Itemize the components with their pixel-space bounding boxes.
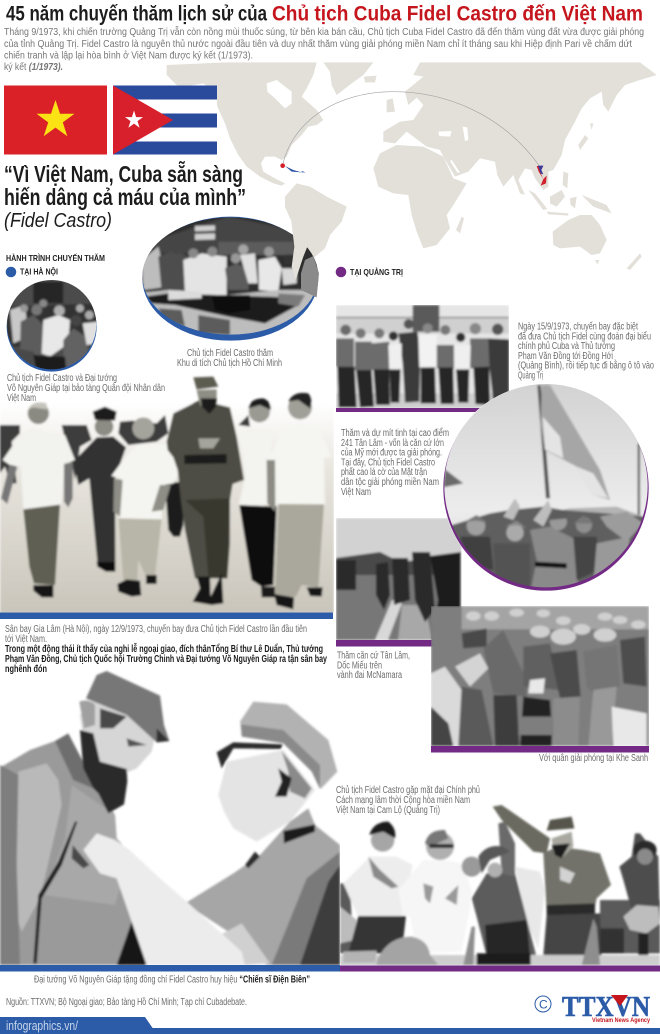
- caption: Tan Lam base: Dốc Miếu trên: [337, 659, 382, 671]
- logo: TTXVN: TTXVN: [562, 992, 650, 1023]
- caption: airport: nghênh đón: [5, 664, 47, 675]
- caption: Cam Lo: Chủ tịch Fidel Castro gặp mặt đại Chính phủ: [336, 784, 480, 796]
- heading: in Hanoi: [6, 266, 58, 277]
- table: [340, 955, 660, 966]
- title: [6, 2, 643, 26]
- photo: with liberation soldiers at Khe Sanh: [431, 606, 649, 746]
- caption: airport: Sân bay Gia Lâm (Hà Nội), ngày 12/9/1973, chuyến bay đưa Chủ tịch Fidel Castro lần đầu tiên: [5, 623, 307, 635]
- world map: [167, 62, 657, 272]
- Giap: uniform: [185, 808, 340, 965]
- map: Eurasia: [383, 62, 657, 195]
- logo: TTXVN: C: [539, 998, 548, 1012]
- background horizon: [340, 883, 660, 953]
- map: South America: [285, 183, 347, 272]
- caption: Castro and Giap at the museum: Việt Nam: [7, 393, 36, 404]
- Giap: cap and head: [217, 702, 337, 842]
- photo: Castro raising the flag (circle): [440, 382, 653, 595]
- caption: Ho Chi Minh relic site: [177, 347, 282, 369]
- Castro: torso: [0, 733, 147, 965]
- caption: Ho Chi Minh relic site: Chủ tịch Fidel Castro thăm: [187, 347, 273, 359]
- checked shirt man: [301, 256, 319, 297]
- caption: Ho Chi Minh relic site: Khu di tích Chủ tịch Hồ Chí Minh: [177, 357, 282, 369]
- photo: Tan Lam base, Doc Mieu: [336, 518, 462, 640]
- text: Tan Lam rally: [341, 427, 449, 498]
- footer band: infographics.vn/: [6, 1019, 78, 1033]
- source: Nguồn: TTXVN; Bộ Ngoại giao; Bảo tàng Hồ Chí Minh; Tạp chí Cubadebate.: [6, 996, 247, 1008]
- caption: Castro and Giap at the museum: [7, 372, 165, 404]
- men on the road: [376, 552, 435, 622]
- caption: Tan Lam base: Thăm căn cứ Tân Lâm,: [337, 650, 410, 662]
- photo: arrival group at Dong Hoi: [336, 305, 509, 408]
- quote: hiến dâng cả máu của mình”: [4, 184, 246, 210]
- man 2 dark uniform: [73, 407, 126, 572]
- text: arrival: Quảng Trị: [518, 370, 543, 382]
- bar: Khe Sanh photo: [431, 746, 649, 752]
- man in helmet raising Castro's hand: [472, 822, 536, 955]
- bar: airport photo: [0, 612, 333, 619]
- map: Africa: [373, 145, 467, 248]
- background walker: [165, 482, 183, 537]
- heading: in Hanoi: TẠI HÀ NỘI: [20, 266, 58, 276]
- caption: airport: tới Việt Nam.: [5, 634, 47, 645]
- heading: in Quang Tri: [336, 266, 403, 277]
- text: Tan Lam rally: Tại đây, Chủ tịch Fidel Castro: [341, 456, 435, 468]
- heading: in Quang Tri: TẠI QUẢNG TRỊ: [350, 266, 403, 277]
- man 5 white shirt black trousers: [239, 398, 277, 597]
- text: Tan Lam rally: 241 Tân Lâm - vốn là căn cứ lớn: [341, 437, 444, 449]
- soldiers and officials in line: [336, 319, 509, 407]
- text: arrival: [518, 320, 654, 382]
- Fidel Castro: [167, 377, 244, 605]
- text: Tan Lam rally: Thăm và dự mít tinh tại cao điểm: [341, 427, 449, 439]
- background crowd: [0, 415, 250, 483]
- Castro: head and beard: [79, 671, 169, 813]
- text: arrival: Phạm Văn Đồng tới Đồng Hới: [518, 350, 613, 362]
- quote: [4, 160, 246, 232]
- man 6 white shirt: [267, 393, 332, 609]
- photo: Gia Lam airport welcome: [0, 377, 334, 613]
- caption: Castro and Giap at the museum: Chủ tịch Fidel Castro và Đại tướng: [7, 372, 117, 384]
- marker: Cuba: [280, 163, 306, 172]
- bar: arrival photo: [336, 408, 510, 412]
- logo: TTXVN: Vietnam News Agency: [592, 1018, 651, 1024]
- caption: Tan Lam base: [337, 650, 410, 681]
- caption: Castro and Giap at the museum: Võ Nguyên Giáp tại bảo tàng Quân đội Nhân dân: [7, 383, 165, 394]
- Fidel Castro raising arm: [493, 805, 611, 955]
- intro paragraph: chiến tranh và lập lại hòa bình ở Việt Nam được ký kết (1/1973).: [4, 50, 253, 62]
- text: arrival: chính phủ Cuba và Thủ tướng: [518, 340, 615, 352]
- flag: Cuba: [113, 86, 217, 154]
- quote: (Fidel Castro): [4, 210, 112, 232]
- crowd of helmets: [466, 609, 646, 645]
- caption: Cam Lo: Cách mạng lâm thời Cộng hòa miền Nam: [336, 794, 470, 806]
- bar: bottom left blue: [0, 965, 340, 972]
- bar: bottom right purple: [340, 966, 660, 972]
- flight arc from Cuba to Vietnam: [283, 92, 540, 167]
- photo: Ho Chi Minh relic site (oval): [142, 216, 319, 341]
- text: Tan Lam rally: Việt Nam: [341, 487, 371, 498]
- text: Tan Lam rally: phất cao lá cờ của Mặt trận: [341, 466, 427, 478]
- quote: “Vì Việt Nam, Cuba sẵn sàng: [4, 160, 243, 187]
- man 3 white shirt: [111, 417, 184, 597]
- map: South America tip over the photo: [290, 210, 325, 280]
- photo: Castro and Giap at the museum (circle): [6, 280, 97, 372]
- map: islands: [364, 76, 642, 270]
- footer band: [0, 1017, 660, 1034]
- man behind, white shirt: [515, 867, 545, 948]
- caption: award: Đại tướng Võ Nguyên Giáp tặng đồng chí Fidel Castro huy hiệu “Chiến sĩ Điện Biên”: [34, 974, 310, 986]
- map: North America: [167, 62, 323, 186]
- intro paragraph: ký kết (1/1973).: [4, 61, 63, 73]
- text: Tan Lam rally: dân tộc giải phóng miền Nam: [341, 476, 439, 488]
- map: Australia: [553, 215, 607, 255]
- man on the right with raised hand: [618, 832, 660, 907]
- map: inland seas: [438, 127, 487, 173]
- text: Tan Lam rally: của Mỹ mới được ta giải phóng.: [341, 447, 442, 459]
- photo: Cam Lo meeting: [340, 805, 660, 966]
- Giap: arm and hand pinning the badge: [83, 833, 245, 965]
- logo: TTXVN: [535, 992, 651, 1024]
- caption: Tan Lam base: vành đai McNamara: [337, 670, 402, 681]
- heading: journey: HÀNH TRÌNH CHUYẾN THĂM: [6, 253, 105, 263]
- map: Greenland: [323, 62, 373, 95]
- man with glasses: [398, 830, 472, 953]
- flag: Vietnam: [4, 86, 107, 154]
- caption: airport: [5, 623, 327, 675]
- intro paragraph: [4, 25, 644, 73]
- title: black part: 45 năm chuyến thăm lịch sử của: [6, 2, 267, 26]
- caption: Cam Lo: Việt Nam tại Cam Lộ (Quảng Trị): [336, 805, 440, 816]
- flowers: [623, 905, 660, 933]
- marker: Vietnam: [537, 166, 547, 186]
- caption: airport: Phạm Văn Đồng, Chủ tịch Quốc hội Trường Chinh và Đại tướng Võ Nguyên Giáp ra tận sân bay: [5, 653, 327, 665]
- man in white shirt, left: [343, 822, 413, 953]
- man 1 white shirt: [1, 402, 75, 597]
- bar: Tan Lam photo: [336, 640, 462, 646]
- photo: Giap awarding Castro the badge: [0, 671, 340, 965]
- caption: Cam Lo: [336, 784, 480, 816]
- caption: airport: Trong một động thái ít thấy của nghi lễ ngoại giao, đích thânTổng Bí thư Lê Duẩn, Thủ tướng: [5, 642, 323, 655]
